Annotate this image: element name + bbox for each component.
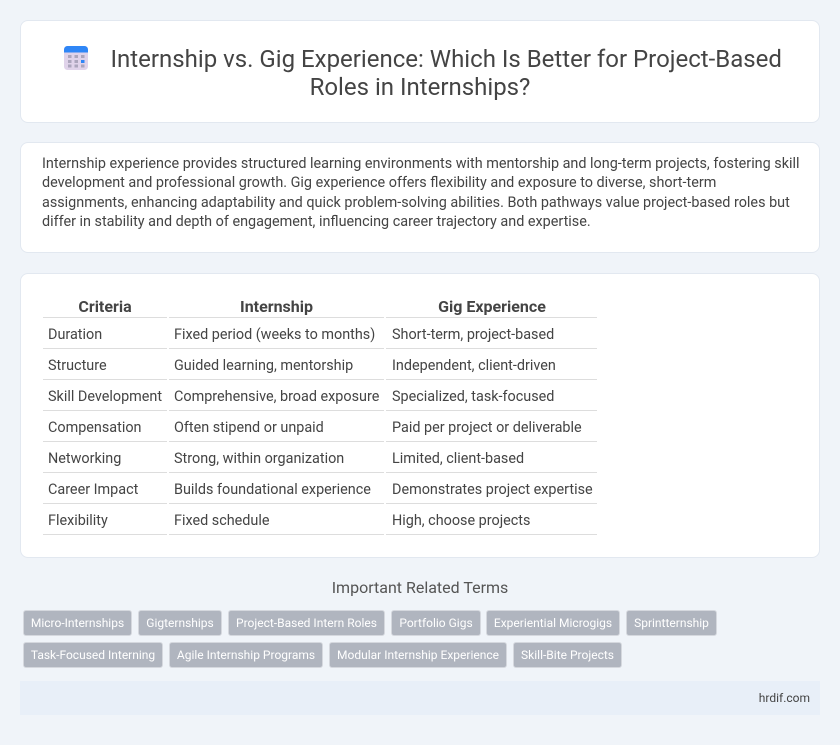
row: networking: Networking: [48, 450, 121, 467]
row: skill development: [48, 388, 554, 405]
row: networking: Limited, client-based: [392, 450, 524, 467]
related terms tags: [23, 610, 717, 668]
row: duration: Duration: [48, 326, 102, 343]
tag: [626, 610, 717, 636]
title: Roles in Internships?: [310, 73, 530, 101]
row: flexibility: [48, 512, 530, 529]
summary text: differ in stability and depth of engagement, influencing career trajectory and expertise.: [42, 213, 591, 230]
tag: Task-Focused Interning: [31, 648, 155, 662]
row: career impact: Career Impact: [48, 481, 138, 498]
row: flexibility: Flexibility: [48, 512, 108, 529]
row: duration: [48, 326, 554, 343]
summary text: [42, 155, 800, 230]
column headers: Gig Experience: [438, 297, 546, 316]
tag: Modular Internship Experience: [337, 648, 499, 662]
tag: Project-Based Intern Roles: [236, 616, 377, 630]
row: flexibility: Fixed schedule: [174, 512, 269, 529]
tag: Skill-Bite Projects: [521, 648, 614, 662]
row: compensation: [48, 419, 582, 436]
footer bar: [20, 681, 820, 715]
row: career impact: Demonstrates project expertise: [392, 481, 593, 498]
row: skill development: Comprehensive, broad exposure: [174, 388, 379, 405]
title: Internship vs. Gig Experience: Which Is Better for Project-Based: [110, 45, 782, 73]
row: networking: [48, 450, 524, 467]
column headers: [78, 297, 546, 316]
title: [110, 45, 782, 101]
tag: Portfolio Gigs: [399, 616, 473, 630]
icon: calendar: [64, 46, 88, 70]
row: structure: Guided learning, mentorship: [174, 357, 353, 374]
tag: [169, 642, 323, 668]
heading: important related terms: Important Related Terms: [332, 578, 508, 597]
tag: Sprintternship: [634, 616, 709, 630]
row: compensation: Often stipend or unpaid: [174, 419, 324, 436]
tag: Gigternships: [146, 616, 214, 630]
column headers: Criteria: [78, 297, 132, 316]
row: structure: Independent, client-driven: [392, 357, 556, 374]
column headers: Internship: [240, 297, 313, 316]
summary text: assignments, enhancing adaptability and quick problem-solving abilities. Both pathways value project-based roles but: [42, 194, 790, 211]
row: compensation: Compensation: [48, 419, 141, 436]
footer source: hrdif.com: [759, 691, 810, 705]
tag: [138, 610, 222, 636]
tag: [23, 642, 163, 668]
tag: Experiential Microgigs: [494, 616, 612, 630]
row: duration: Fixed period (weeks to months): [174, 326, 375, 343]
summary text: Internship experience provides structured learning environments with mentorship and long-term projects, fostering skill: [42, 155, 800, 172]
tag: [486, 610, 620, 636]
row: skill development: Skill Development: [48, 388, 162, 405]
row: career impact: [48, 481, 593, 498]
tag: Agile Internship Programs: [177, 648, 315, 662]
row: flexibility: High, choose projects: [392, 512, 530, 529]
row: networking: Strong, within organization: [174, 450, 344, 467]
row: duration: Short-term, project-based: [392, 326, 554, 343]
panel: summary: [20, 142, 820, 253]
summary text: development and professional growth. Gig experience offers flexibility and exposure to diverse, short-term: [42, 174, 716, 191]
comparison table: [43, 297, 597, 535]
row: structure: Structure: [48, 357, 107, 374]
tag: [513, 642, 622, 668]
row: career impact: Builds foundational experience: [174, 481, 371, 498]
row: skill development: Specialized, task-focused: [392, 388, 554, 405]
tag: [23, 610, 132, 636]
row: compensation: Paid per project or deliverable: [392, 419, 582, 436]
row: structure: [48, 357, 556, 374]
tag: Micro-Internships: [31, 616, 124, 630]
tag: [329, 642, 507, 668]
tag: [391, 610, 481, 636]
panel: comparison table: [20, 273, 820, 558]
tag: [228, 610, 385, 636]
panel: title header: [20, 20, 820, 123]
